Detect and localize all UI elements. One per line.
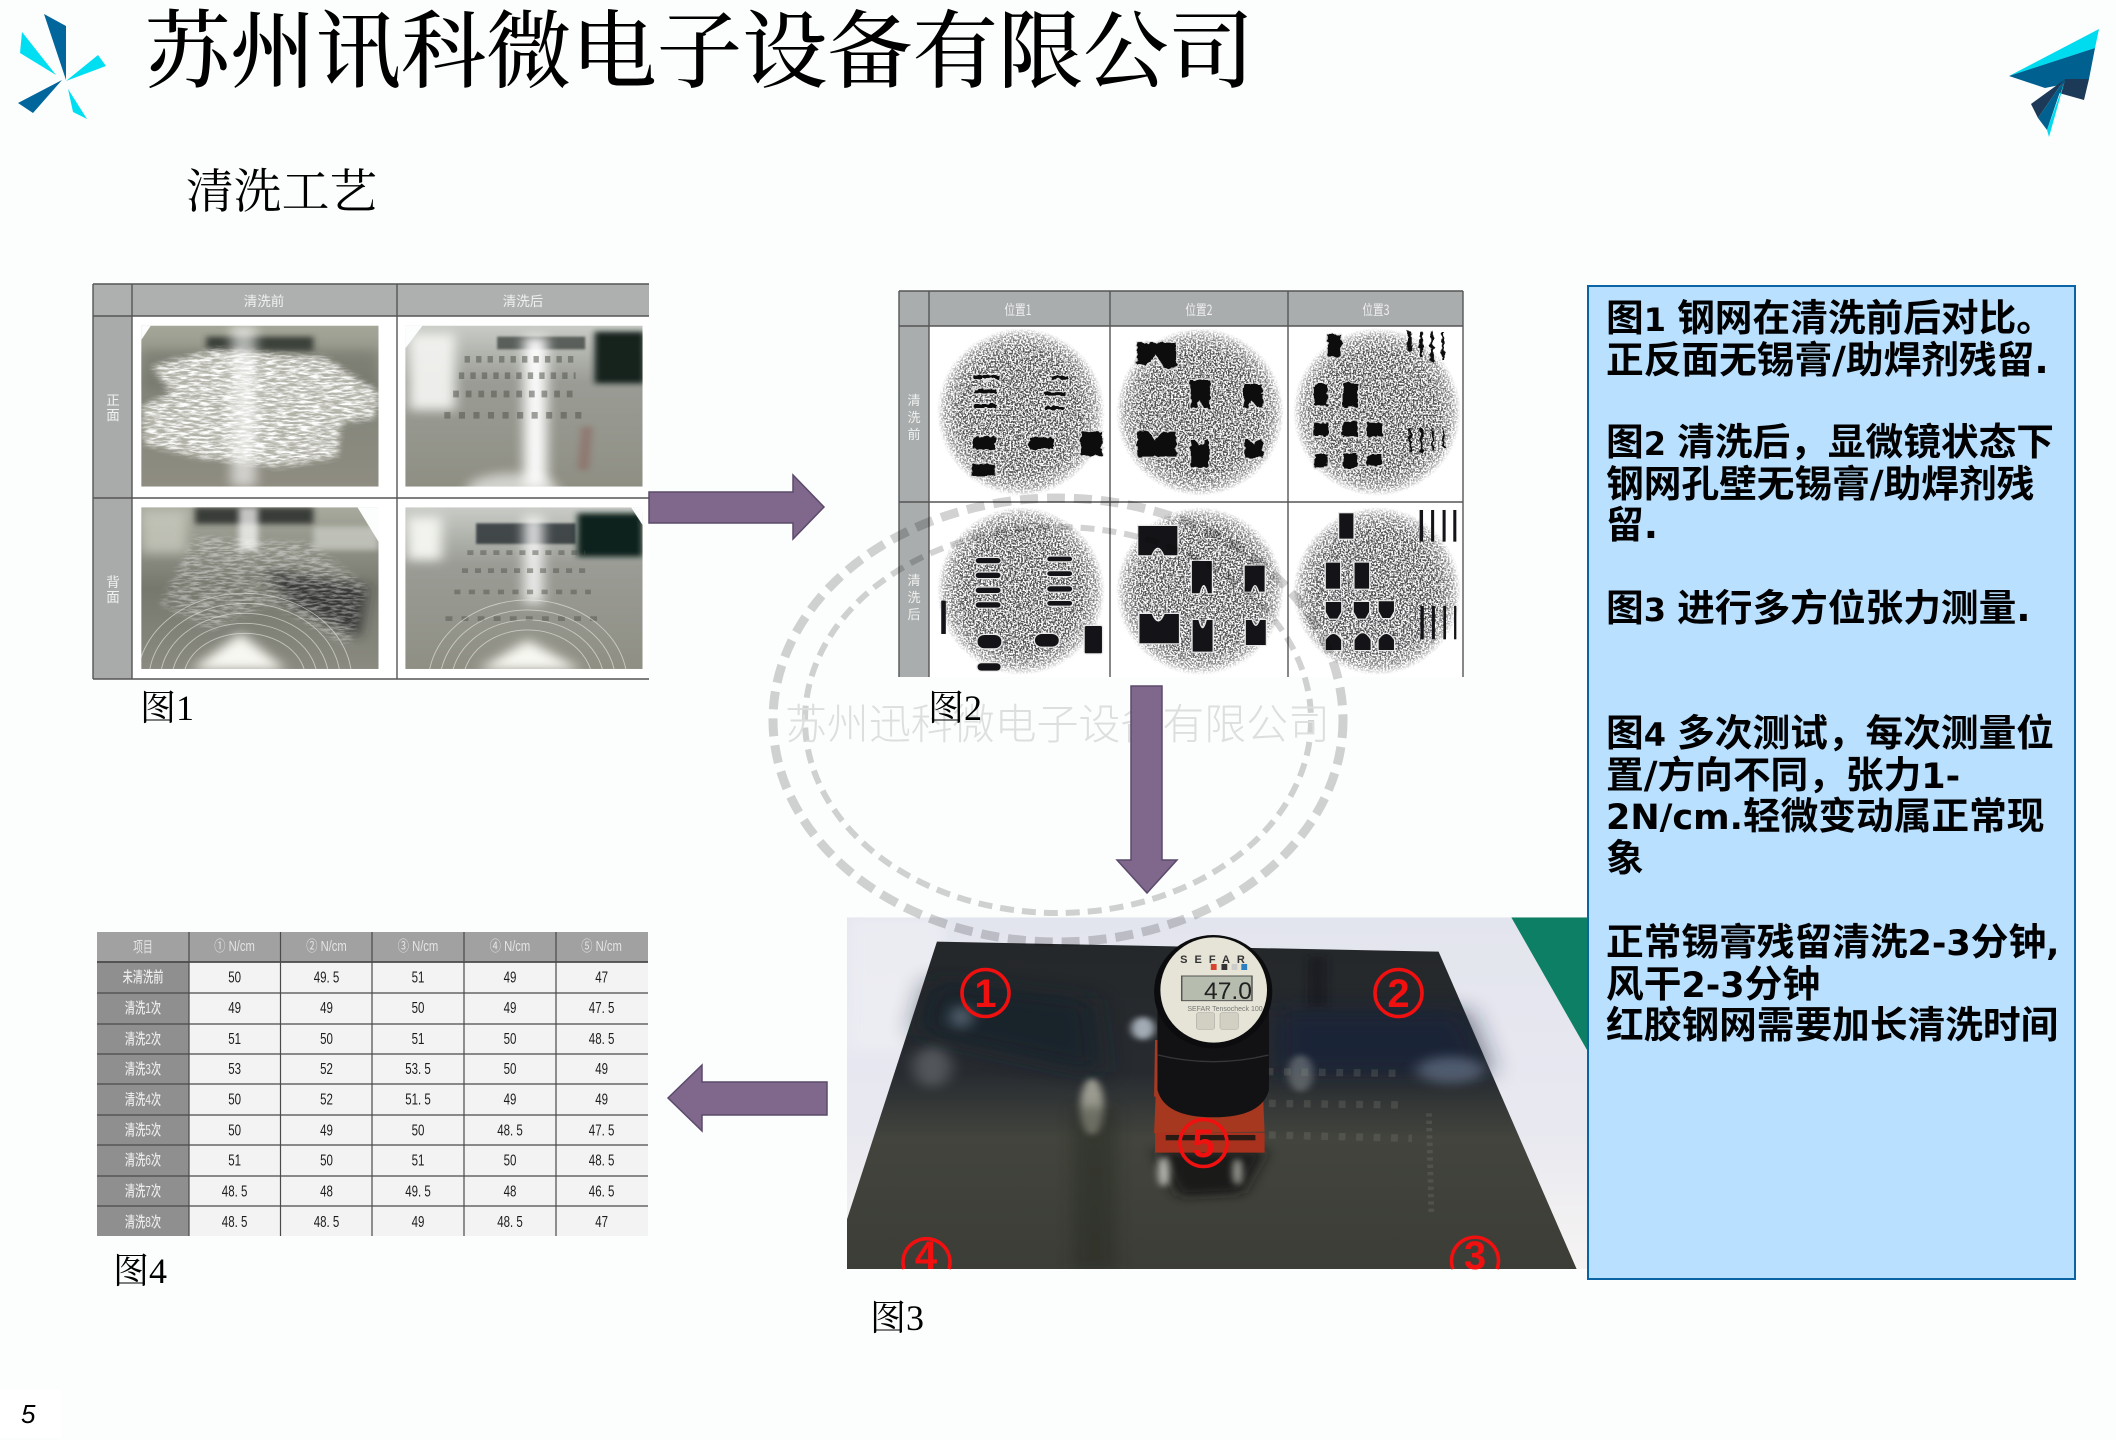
row labels: 清洗6次 (125, 1151, 161, 1169)
stencil plate (847, 942, 1577, 1269)
figure 3: tension meter photo: 2 (1387, 972, 1410, 1016)
table header text: ① N/cm (214, 937, 255, 954)
table values: 51 (412, 1029, 425, 1047)
table header band: 清 (907, 570, 921, 589)
table values: 48. 5 (314, 1212, 340, 1230)
row labels: 清洗8次 (125, 1213, 161, 1231)
note: figure 4: 2N/cm.轻微变动属正常现 (1606, 794, 2044, 838)
table values: 51 (228, 1150, 241, 1169)
meter labels: 47.0 (1204, 978, 1252, 1005)
note: figure 1: 图1 钢网在清洗前后对比。 (1606, 296, 2054, 340)
note: cleaning time: 风干2-3分钟 (1606, 962, 1820, 1006)
table header text (133, 937, 622, 956)
caption: figure 2: 图2 (928, 688, 982, 728)
row labels: 清洗4次 (125, 1090, 161, 1108)
table header band: 面 (106, 586, 120, 606)
note: cleaning time (1606, 920, 2059, 1047)
table values: 50 (320, 1150, 333, 1169)
photo: back after cleaning (405, 507, 643, 669)
table header band: 位置3 (1362, 299, 1390, 320)
table header text: ③ N/cm (398, 937, 438, 954)
microscope speckle fields (937, 328, 1461, 675)
table values: 49 (412, 1212, 425, 1230)
table values: 51 (228, 1029, 241, 1047)
table values: 48. 5 (497, 1212, 523, 1230)
row labels: 清洗3次 (125, 1060, 161, 1078)
table header band: 清洗后 (503, 290, 543, 310)
figure 1: before and after photo table (92, 283, 649, 680)
table header band: 位置1 (1004, 299, 1032, 320)
table header band: 后 (907, 604, 921, 623)
table values: 50 (228, 1090, 241, 1108)
note: figure 4: 象 (1606, 836, 1644, 880)
table header band: 洗 (907, 587, 921, 606)
table header text: ⑤ N/cm (581, 937, 622, 954)
caption: figure 4: 图4 (113, 1251, 167, 1291)
note: figure 2: 图2 清洗后，显微镜状态下 (1606, 420, 2054, 464)
rough pads before cleaning (972, 332, 1444, 476)
table header text: ④ N/cm (490, 937, 530, 954)
table values: 50 (228, 1120, 241, 1139)
table header band (899, 291, 1463, 677)
row labels: 清洗5次 (125, 1121, 161, 1139)
table values: 50 (504, 1029, 517, 1047)
table values: 50 (504, 1150, 517, 1169)
note: figure 1 (1606, 296, 2054, 382)
table values: 48 (504, 1181, 517, 1200)
meter labels (1180, 954, 1263, 1013)
table values: 51 (412, 1150, 425, 1169)
table header band: 清 (907, 390, 921, 409)
table values: 48. 5 (589, 1029, 615, 1047)
table values: 48. 5 (497, 1120, 523, 1139)
caption: figure 3: 图3 (870, 1298, 924, 1338)
table values: 48. 5 (589, 1150, 615, 1169)
note: cleaning time: 正常锡膏残留清洗2-3分钟, (1606, 920, 2059, 964)
note: cleaning time: 红胶钢网需要加长清洗时间 (1606, 1003, 2058, 1047)
table header text: 项目 (133, 939, 153, 956)
caption: figure 1: 图1 (140, 688, 194, 728)
table header band: 洗 (907, 407, 921, 426)
table values: 52 (320, 1059, 333, 1077)
table values: 49 (595, 1059, 608, 1077)
table header band: 面 (106, 404, 120, 424)
reflection under base (1155, 1150, 1267, 1197)
table values: 49 (320, 1120, 333, 1139)
note: figure 2: 钢网孔壁无锡膏/助焊剂残 (1606, 462, 2034, 506)
table values: 49 (504, 968, 517, 986)
table values: 49. 5 (405, 1181, 431, 1200)
table values: 48. 5 (222, 1181, 248, 1200)
row labels (123, 968, 164, 1231)
page number: 5 (21, 1399, 35, 1429)
panel: explanatory notes (1587, 285, 2076, 1280)
note: figure 2: 留. (1606, 503, 1658, 547)
table values: 51 (412, 968, 425, 986)
meter cylinder (1158, 1011, 1269, 1118)
table values: 46. 5 (589, 1181, 615, 1200)
watermark dashed rings (773, 498, 1343, 942)
table values: 51. 5 (405, 1090, 431, 1108)
table values: 49 (595, 1090, 608, 1108)
figure 3: tension meter photo: 1 (974, 972, 997, 1016)
table header band: 背 (106, 571, 120, 591)
table values: 47. 5 (589, 1120, 615, 1139)
photo: back before cleaning (141, 507, 378, 669)
table header text: ② N/cm (306, 937, 347, 954)
clean pads after cleaning (941, 510, 1456, 671)
table values: 52 (320, 1090, 333, 1108)
page number (0, 1390, 61, 1438)
logo: right paper plane (2009, 29, 2099, 137)
note: figure 1: 正反面无锡膏/助焊剂残留. (1606, 338, 2049, 382)
table values: 53 (228, 1059, 241, 1077)
row labels: 清洗2次 (125, 1030, 161, 1048)
table values: 49 (504, 1090, 517, 1108)
photo: front after cleaning (405, 326, 643, 487)
table header band: 正 (106, 389, 120, 409)
row labels: 清洗7次 (125, 1182, 161, 1200)
table values (222, 968, 615, 1230)
figure 3: tension meter photo (847, 917, 1587, 1270)
photo: front before cleaning (141, 326, 379, 487)
table values: 47 (595, 968, 608, 986)
meter labels: SEFAR Tensocheck 100 (1187, 1006, 1263, 1013)
table header band: 前 (907, 424, 921, 443)
table values: 49. 5 (314, 968, 340, 986)
row labels: 未清洗前 (123, 968, 164, 986)
watermark text: 苏州迅科微电子设备有限公司 (785, 691, 1330, 752)
figure 3: tension meter photo: 3 (1464, 1234, 1486, 1278)
red base (1154, 1040, 1158, 1097)
table values: 53. 5 (405, 1059, 431, 1077)
photos (137, 326, 644, 767)
table values: 47 (595, 1212, 608, 1230)
table values: 50 (320, 1029, 333, 1047)
meter labels: SEFAR (1180, 954, 1252, 966)
logo: left pinwheel (18, 14, 106, 119)
table values: 47. 5 (589, 998, 615, 1016)
table header band (93, 284, 649, 679)
table values: 49 (320, 998, 333, 1016)
red position markers (903, 970, 1498, 1269)
table values: 50 (228, 968, 241, 986)
table values: 49 (228, 998, 241, 1016)
note: figure 2 (1606, 420, 2054, 547)
table values: 50 (412, 998, 425, 1016)
note: figure 4: 置/方向不同，张力1- (1606, 752, 1960, 796)
table values: 49 (504, 998, 517, 1016)
table values: 48 (320, 1181, 333, 1200)
table values: 50 (412, 1120, 425, 1139)
table values: 48. 5 (222, 1212, 248, 1230)
table values: 50 (504, 1059, 517, 1077)
note: figure 4 (1606, 711, 2054, 880)
figure 3: tension meter photo: 5 (1192, 1122, 1215, 1166)
note: figure 4: 图4 多次测试，每次测量位 (1606, 711, 2054, 755)
subtitle: 清洗工艺 (186, 153, 377, 222)
row labels: 清洗1次 (125, 999, 161, 1017)
note: figure 3: 图3 进行多方位张力测量. (1606, 586, 2031, 630)
table header band: 清洗前 (244, 290, 284, 310)
figure 3: tension meter photo: 4 (915, 1234, 938, 1278)
table header band: 位置2 (1185, 299, 1213, 320)
